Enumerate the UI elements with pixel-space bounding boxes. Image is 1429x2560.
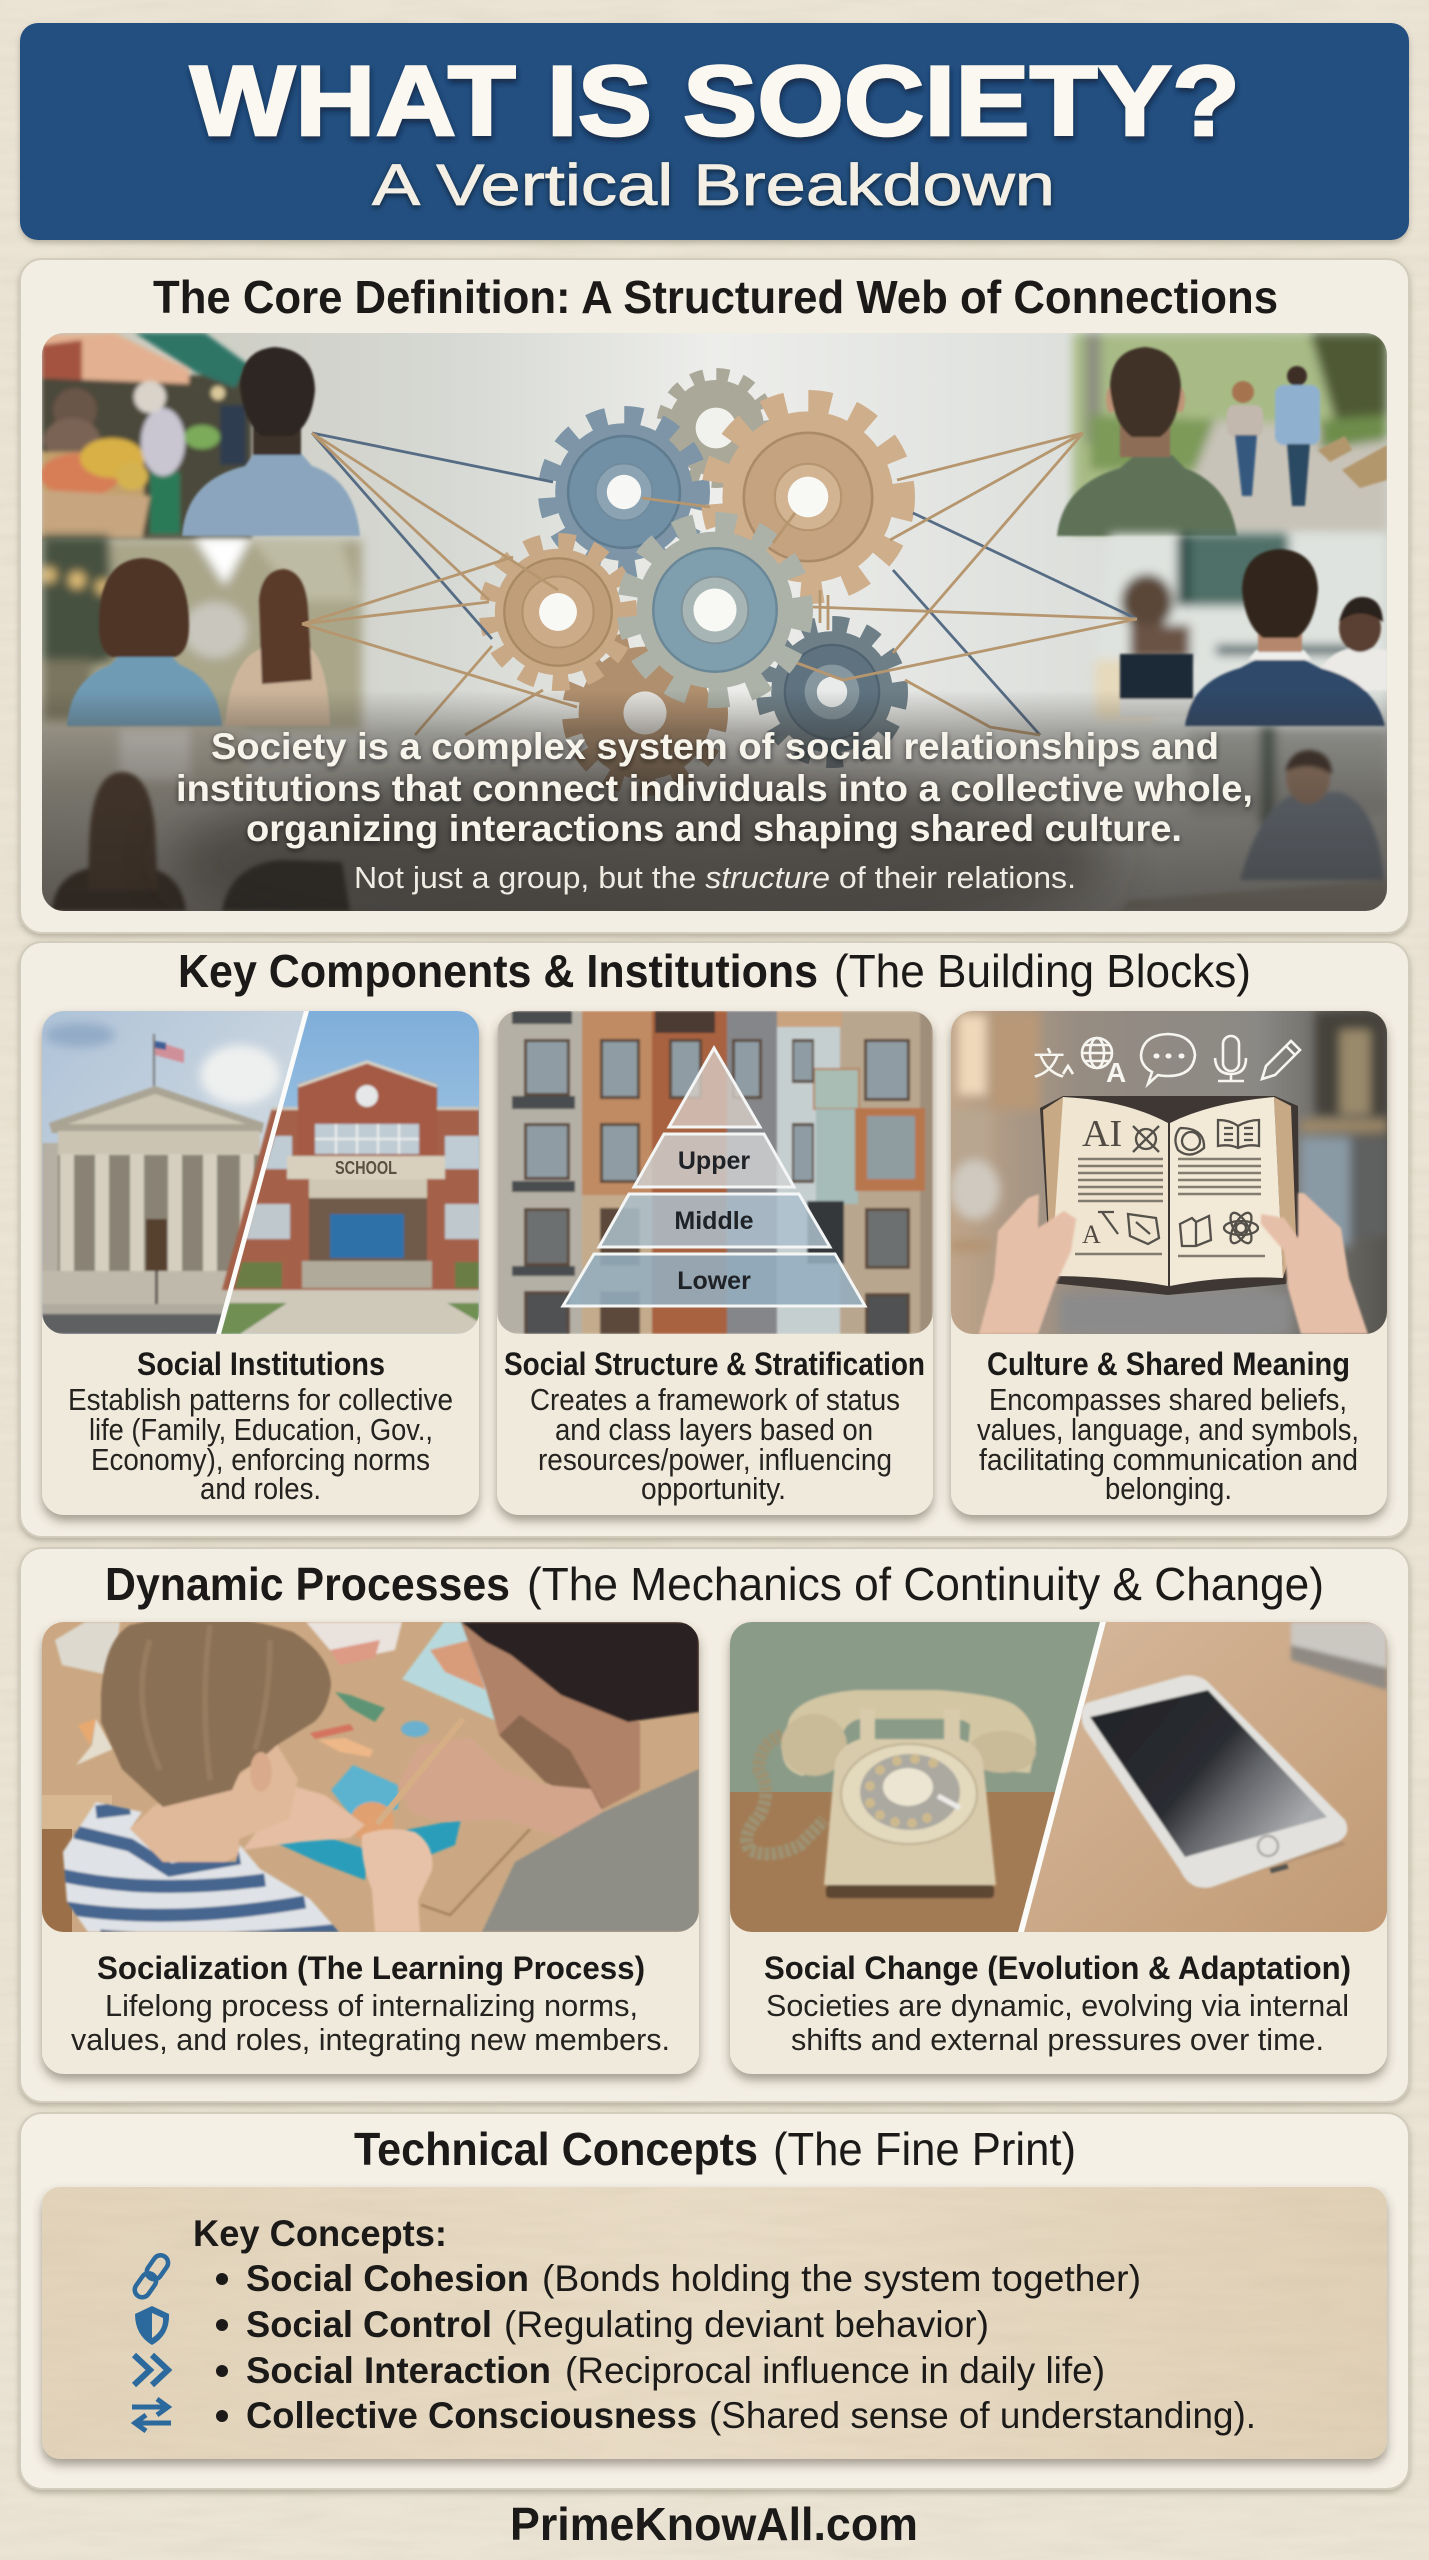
icon: exchange arrows: [132, 2399, 171, 2431]
panel: dynamic processes: [20, 1548, 1409, 2102]
heading: key components: Key Components & Institutions: [178, 945, 818, 997]
pyramid chart: [563, 1048, 865, 1306]
person: man left: [182, 347, 360, 536]
icon: chain link: [132, 2252, 171, 2300]
floating language icons: 文: [1033, 1046, 1065, 1082]
card: social change: [730, 1622, 1387, 2074]
title banner: [20, 23, 1409, 240]
gear: big tan: [714, 403, 902, 591]
card text: social structure: opportunity.: [641, 1471, 786, 1506]
person: man right: [1057, 347, 1237, 536]
overlay definition text: Society is a complex system of social relationships and: [211, 726, 1219, 767]
heading: key components: (The Building Blocks): [834, 945, 1251, 997]
card text: culture: values, language, and symbols,: [977, 1412, 1359, 1447]
concept: social interaction: (Reciprocal influence in daily life): [565, 2350, 1105, 2391]
card title: social institutions: Social Institutions: [137, 1346, 385, 1382]
office scene: [1090, 534, 1387, 825]
card text: socialization: values, and roles, integrating new members.: [71, 2022, 670, 2057]
card text: culture: [977, 1382, 1359, 1506]
rotary phone: [747, 1690, 1036, 1898]
heading: dynamic processes: Dynamic Processes: [105, 1558, 510, 1610]
card text: social change: [766, 1988, 1349, 2057]
book: A: [1082, 1220, 1101, 1249]
image: open book with floating icons: [950, 1011, 1387, 1334]
card text: social institutions: life (Family, Education, Gov.,: [89, 1412, 433, 1447]
image: rotary phone and smartphone: [730, 1622, 1387, 1932]
book: [1040, 1096, 1299, 1295]
divider: [1018, 1622, 1106, 1932]
heading: dynamic processes: (The Mechanics of Continuity & Change): [527, 1558, 1324, 1610]
pyramid labels: Upper: [678, 1147, 750, 1175]
pyramid tier: lower: [563, 1254, 865, 1306]
connection strings: [302, 433, 1137, 735]
card text: culture: belonging.: [1105, 1471, 1232, 1506]
school: [219, 1061, 479, 1334]
card title: social structure: Social Structure & Stratification: [504, 1346, 925, 1382]
gear: blue: [548, 416, 700, 568]
pyramid tier: top: [669, 1048, 760, 1127]
child: [60, 1616, 432, 1939]
title: WHAT IS SOCIETY?: [190, 45, 1240, 156]
gear: small tan: [488, 542, 628, 682]
card: social institutions: [42, 1011, 479, 1515]
subtitle: A Vertical Breakdown: [372, 153, 1055, 218]
park scene: [1073, 333, 1387, 533]
floating language icons: [1033, 1034, 1300, 1088]
concept: social control: [216, 2304, 989, 2345]
book AI text: AI: [1082, 1113, 1122, 1155]
park benches and walkers: [1227, 366, 1387, 506]
overlay definition text: [176, 726, 1253, 849]
heading: key components: [178, 945, 1251, 997]
floating language icons: A: [1106, 1057, 1126, 1088]
card text: culture: facilitating communication and: [979, 1442, 1358, 1477]
gear: center gray blue: [629, 524, 801, 696]
craft papers: [55, 1622, 499, 1765]
card text: socialization: Lifelong process of internalizing norms,: [105, 1988, 638, 2023]
gear: back tan: [572, 640, 718, 786]
smartphone: [1081, 1675, 1347, 1889]
overlay definition text: institutions that connect individuals into a collective whole,: [176, 768, 1253, 809]
card title: social change: Social Change (Evolution & Adaptation): [764, 1950, 1351, 1986]
dark caption overlay: [42, 690, 1387, 955]
gear: back gray: [663, 375, 769, 481]
image: courthouse and school: [42, 1011, 479, 1334]
concept: social cohesion: Social Cohesion: [246, 2258, 529, 2299]
key concepts note: [42, 2187, 1387, 2459]
card text: socialization: [71, 1988, 670, 2057]
concept: collective consciousness: [216, 2395, 1256, 2436]
cutouts on table: [268, 1765, 530, 1915]
pyramid labels: [674, 1147, 754, 1295]
card: socialization: [42, 1616, 699, 2074]
diagonal divider: [216, 1011, 309, 1334]
card text: social structure: and class layers based on: [555, 1412, 873, 1447]
book on desk: [1291, 1622, 1387, 1690]
book icons: [1098, 1120, 1259, 1246]
gear: lower right blue: [765, 625, 899, 759]
card title: culture: Culture & Shared Meaning: [987, 1346, 1350, 1382]
card text: social structure: resources/power, influencing: [538, 1442, 892, 1477]
panel: key components: [20, 942, 1409, 1537]
overlay definition text: organizing interactions and shaping shared culture.: [246, 808, 1182, 849]
panel: core definition: [20, 259, 1409, 955]
pyramid labels: Middle: [674, 1207, 754, 1235]
concept: social control: Social Control: [246, 2304, 492, 2345]
card text: social structure: Creates a framework of status: [530, 1382, 900, 1417]
image: child and adult crafting: [42, 1616, 699, 1939]
card text: social institutions: Economy), enforcing norms: [91, 1442, 430, 1477]
pyramid labels: Lower: [677, 1267, 751, 1295]
person: woman foreground: [52, 772, 350, 911]
concept: social interaction: Social Interaction: [246, 2350, 551, 2391]
market scene: [40, 333, 252, 540]
courthouse: [42, 1034, 264, 1334]
man at desk: [1120, 750, 1387, 911]
pyramid tier: middle: [599, 1194, 830, 1247]
panel: technical concepts: [20, 2113, 1409, 2489]
icon: shield: [135, 2306, 169, 2345]
hands: [979, 1193, 1368, 1334]
image: apartment building with pyramid: [497, 1011, 933, 1334]
concept: social control: (Regulating deviant behavior): [504, 2304, 989, 2345]
heading: technical concepts: [354, 2123, 1076, 2175]
card text: social change: shifts and external pressures over time.: [791, 2022, 1324, 2057]
card text: social structure: [530, 1382, 900, 1506]
concept: collective consciousness: Collective Consciousness: [246, 2395, 697, 2436]
card text: social institutions: and roles.: [200, 1471, 321, 1506]
card text: culture: Encompasses shared beliefs,: [989, 1382, 1347, 1417]
adult: [398, 1622, 699, 1932]
concept: social cohesion: (Bonds holding the system together): [542, 2258, 1141, 2299]
blurred crowd lower left: [42, 536, 362, 795]
concept: social cohesion: [216, 2258, 1141, 2299]
pyramid tier: upper: [634, 1134, 794, 1187]
gears cluster: [488, 375, 902, 786]
heading: technical concepts: (The Fine Print): [773, 2123, 1076, 2175]
office people and desk: [1120, 549, 1387, 726]
footer: site name: PrimeKnowAll.com: [510, 2498, 918, 2550]
concept: social interaction: [216, 2350, 1105, 2391]
card text: social institutions: [68, 1382, 453, 1506]
note heading: Key Concepts:: [193, 2213, 447, 2254]
card text: social institutions: Establish patterns for collective: [68, 1382, 453, 1417]
school sign text: SCHOOL: [335, 1158, 397, 1178]
concept: collective consciousness: (Shared sense of understanding).: [709, 2395, 1256, 2436]
card: culture: [950, 1011, 1387, 1515]
blurred room background: [950, 1011, 1387, 1334]
person: women left: [67, 558, 330, 726]
heading: technical concepts: Technical Concepts: [354, 2123, 758, 2175]
card text: social change: Societies are dynamic, evolving via internal: [766, 1988, 1349, 2023]
icon: chevrons: [134, 2355, 168, 2385]
image: gears and people network: [40, 333, 1387, 955]
pencil: [377, 1719, 463, 1824]
heading: dynamic processes: [105, 1558, 1324, 1610]
card: social structure: [497, 1011, 933, 1515]
heading: core definition: The Core Definition: A Structured Web of Connections: [153, 271, 1278, 323]
card title: socialization: Socialization (The Learning Process): [97, 1950, 645, 1986]
overlay tagline: Not just a group, but the structure of their relations.: [354, 860, 1076, 895]
